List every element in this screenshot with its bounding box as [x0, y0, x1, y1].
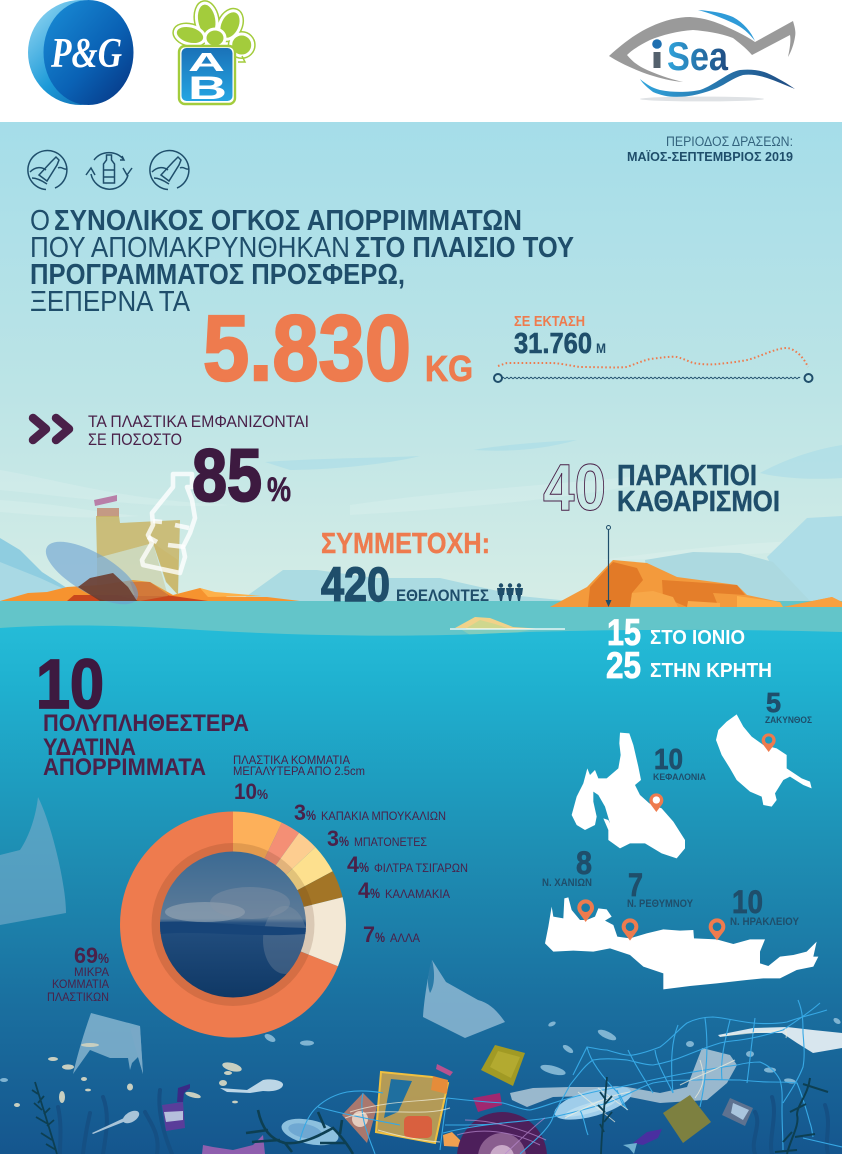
- segment: other 7%: [233, 897, 346, 966]
- label: Chania 8: Ν. ΧΑΝΙΩΝ: [542, 877, 592, 889]
- plastics share stat: ΣΕ ΠΟΣΟΣΤΟ: [88, 430, 182, 449]
- pin: Heraklion: [709, 918, 725, 940]
- main title: [30, 205, 574, 318]
- label: caps: %: [306, 807, 316, 823]
- participation stat: 420: [321, 559, 390, 612]
- main title: ΣΥΝΟΛΙΚΟΣ ΟΓΚΟΣ ΑΠΟΡΡΙΜΜΑΤΩΝ: [54, 205, 522, 237]
- fishing net: [300, 1000, 842, 1154]
- label: straws: ΚΑΛΑΜΑΚΙΑ: [385, 887, 450, 901]
- pin: Chania: [577, 899, 594, 922]
- label: large pieces 10%: %: [257, 786, 268, 802]
- logo: iSea: Sea: [667, 35, 729, 79]
- label: large pieces 10%: [233, 753, 365, 804]
- icon: bottle in waves 1: [28, 151, 67, 190]
- segment: straws 4%: [233, 871, 343, 924]
- segment: small plastics 69%: [120, 812, 338, 1038]
- label: Kefalonia 10: [653, 744, 706, 783]
- label: cotton buds: 3: [327, 826, 339, 851]
- inner shadow ring: [152, 843, 314, 1006]
- label: straws: %: [370, 885, 380, 901]
- background seaweed silhouettes: [58, 1090, 828, 1154]
- label: other: ΑΛΛΑ: [390, 931, 420, 945]
- heading: top 10 marine litter: 10: [36, 645, 104, 723]
- seaweed: centre: [246, 1110, 353, 1154]
- participation stat: ΣΥΜΜΕΤΟΧΗ:: [321, 528, 490, 560]
- label: Rethymno 7: Ν. ΡΕΘΥΜΝΟΥ: [627, 898, 694, 910]
- donut labels: [47, 753, 468, 1004]
- map: Zakynthos: [716, 714, 812, 807]
- plastics share stat: %: [267, 471, 291, 509]
- cleanup split by region: ΣΤΟ ΙΟΝΙΟ: [650, 627, 745, 649]
- rocks: right shore: [550, 560, 842, 607]
- blue disc: [279, 1114, 341, 1150]
- label: small pieces 69%: ΚΟΜΜΑΤΙΑ: [52, 977, 109, 991]
- purple bottle: [162, 1084, 190, 1131]
- pin: Rethymno: [622, 918, 638, 941]
- coastline length stat: [494, 313, 812, 382]
- label: caps: 3: [294, 800, 306, 825]
- translucent plastic sheet: [510, 1048, 737, 1107]
- foreground seaweed: [32, 1077, 828, 1154]
- label: Kefalonia 10: ΚΕΦΑΛΟΝΙΑ: [653, 772, 706, 783]
- heading: top 10 marine litter: ΑΠΟΡΡΙΜΜΑΤΑ: [43, 754, 206, 781]
- logo: iSea: [609, 10, 795, 101]
- label: other: [363, 922, 420, 947]
- label: small pieces 69%: ΠΛΑΣΤΙΚΩΝ: [47, 990, 109, 1004]
- logo: P&G: P&G: [50, 31, 122, 77]
- illustration: plastic bag far left: [0, 797, 66, 925]
- logo: AB: A: [188, 47, 225, 77]
- label: cotton buds: [327, 826, 427, 851]
- cleanup split by region: ΣΤΗΝ ΚΡΗΤΗ: [650, 660, 772, 682]
- pin: Kefalonia: [649, 793, 663, 812]
- label: large pieces 10%: ΜΕΓΑΛΥΤΕΡΑ ΑΠΟ 2.5cm: [233, 764, 365, 778]
- label: small pieces 69%: [47, 943, 109, 1004]
- sky background: [0, 122, 842, 612]
- label: Chania 8: 8: [576, 845, 592, 881]
- blue cloud wisps: [265, 440, 842, 479]
- period of actions: ΠΕΡΙΟΔΟΣ ΔΡΑΣΕΩΝ:: [666, 134, 793, 149]
- map labels: [542, 687, 812, 928]
- coastline length stat: 31.760: [514, 328, 592, 360]
- label: Heraklion 10: [730, 884, 800, 928]
- island maps: [545, 714, 818, 989]
- centre photo: sea: [160, 851, 307, 998]
- header white band: [0, 0, 842, 122]
- main title: ΠΟΥ ΑΠΟΜΑΚΡΥΝΘΗΚΑΝ: [30, 232, 350, 264]
- arrow: from coast to counts: [606, 526, 612, 607]
- seaweed: left: [32, 1082, 57, 1154]
- logo: AB: [173, 2, 253, 106]
- participation stat: ΕΘΕΛΟΝΤΕΣ: [396, 586, 489, 605]
- big number: 5.830 kg: 5.830: [203, 296, 411, 400]
- grey box: [722, 1098, 753, 1126]
- label: Rethymno 7: 7: [628, 867, 643, 903]
- island reflection: [450, 617, 565, 641]
- purple fish-shaped fragment: [623, 1129, 662, 1154]
- sea background: [0, 601, 842, 1154]
- label: cigarette filters: %: [359, 859, 369, 875]
- purple net strands over disc: [457, 1118, 546, 1154]
- icon: volunteers: [497, 583, 523, 601]
- plastics share stat: 85: [192, 434, 262, 517]
- label: other: %: [375, 929, 385, 945]
- heading: top 10 marine litter: ΥΔΑΤΙΝΑ: [43, 734, 136, 761]
- diamond packet: [342, 1093, 377, 1143]
- label: small pieces 69%: %: [98, 950, 109, 966]
- heading: top 10 marine litter: [36, 645, 249, 781]
- coastal cleanups stat: ΠΑΡΑΚΤΙΟΙ: [617, 460, 757, 492]
- label: cigarette filters: 4: [347, 852, 360, 877]
- seaweed: middle right: [598, 1077, 612, 1154]
- coastline length stat: ΣΕ ΕΚΤΑΣΗ: [514, 313, 585, 330]
- label: cigarette filters: [347, 852, 468, 877]
- cleanup split by region: 15: [607, 612, 641, 653]
- cleanup split by region: [606, 612, 772, 686]
- illustration: jug, bottle and disc floating: [37, 474, 195, 616]
- label: other: 7: [363, 922, 375, 947]
- period of actions: ΜΑΪΟΣ-ΣΕΠΤΕΜΒΡΙΟΣ 2019: [627, 149, 793, 164]
- label: caps: ΚΑΠΑΚΙΑ ΜΠΟΥΚΑΛΙΩΝ: [321, 809, 446, 823]
- green packet: [663, 1095, 711, 1143]
- mountains: [0, 516, 842, 601]
- coastal cleanups stat: ΚΑΘΑΡΙΣΜΟΙ: [617, 486, 780, 518]
- illustration: plastic bag left: [73, 1013, 143, 1074]
- label: small pieces 69%: 69: [74, 943, 98, 968]
- blue disc right: [551, 1079, 635, 1127]
- logo: AB: B: [188, 70, 227, 106]
- map: Kefalonia: [572, 733, 685, 858]
- illustration: bottom litter: [92, 1027, 842, 1154]
- yellow jug: [376, 1064, 462, 1147]
- donut chart: [120, 812, 346, 1038]
- seaweed: right: [775, 1078, 828, 1154]
- pink packet: [473, 1093, 502, 1112]
- label: large pieces 10%: 10: [234, 779, 257, 804]
- clouds: [0, 470, 842, 560]
- coastal cleanups stat: [543, 450, 780, 524]
- big number: 5.830 kg: KG: [425, 348, 473, 389]
- segment: large plastics 10%: [233, 812, 282, 924]
- icon: double chevron: [33, 418, 69, 440]
- plastics share stat: ΤΑ ΠΛΑΣΤΙΚΑ ΕΜΦΑΝΙΖΟΝΤΑΙ: [88, 412, 309, 431]
- label: Heraklion 10: 10: [732, 884, 763, 920]
- participation stat: [321, 528, 523, 612]
- label: cotton buds: %: [339, 833, 349, 849]
- deep sea: [0, 626, 842, 1154]
- label: small pieces 69%: ΜΙΚΡΑ: [74, 965, 109, 979]
- segment: cigarette filters 4%: [233, 847, 333, 924]
- rocks: left shore: [0, 580, 300, 601]
- white plastic top right: [718, 1027, 842, 1053]
- plastic fragments: [0, 1017, 842, 1107]
- map: Crete: [545, 897, 818, 989]
- purple fragment: [202, 1135, 265, 1154]
- icon group: bottle recycling: [28, 151, 189, 190]
- label: cotton buds: ΜΠΑΤΟΝΕΤΕΣ: [354, 835, 427, 849]
- label: Kefalonia 10: 10: [654, 744, 683, 776]
- illustration: plastic bag right of donut: [423, 960, 505, 1038]
- main title: Ο: [30, 205, 50, 237]
- logo: P&G: [28, 0, 134, 105]
- olive box: [481, 1045, 525, 1086]
- coastal cleanups stat: 40: [543, 450, 606, 524]
- label: caps: [294, 800, 446, 825]
- main title: ΠΡΟΓΡΑΜΜΑΤΟΣ ΠΡΟΣΦΕΡΩ,: [30, 259, 405, 291]
- segment: cotton buds 3%: [233, 833, 315, 924]
- label: straws: 4: [358, 878, 371, 903]
- label: cigarette filters: ΦΙΛΤΡΑ ΤΣΙΓΑΡΩΝ: [374, 861, 468, 875]
- label: large pieces 10%: ΠΛΑΣΤΙΚΑ ΚΟΜΜΑΤΙΑ: [233, 753, 350, 767]
- label: Zakynthos 5: 5: [766, 687, 781, 718]
- purple disc: [457, 1112, 547, 1154]
- net highlights: [345, 1028, 786, 1142]
- plastics share stat: [88, 412, 309, 517]
- label: straws: [358, 878, 450, 903]
- label: Zakynthos 5: ΖΑΚΥΝΘΟΣ: [765, 715, 812, 726]
- pin: Zakynthos: [762, 733, 776, 752]
- icon: recycling bottle: [86, 153, 132, 189]
- label: Rethymno 7: [627, 867, 694, 910]
- main title: ΣΤΟ ΠΛΑΙΣΙΟ ΤΟΥ: [355, 232, 574, 264]
- spoon: [92, 1108, 141, 1134]
- coastline length stat: M: [596, 340, 606, 356]
- main title: ΞΕΠΕΡΝΑ ΤΑ: [30, 286, 191, 318]
- heading: top 10 marine litter: ΠΟΛΥΠΛΗΘΕΣΤΕΡΑ: [43, 710, 249, 737]
- label: Heraklion 10: Ν. ΗΡΑΚΛΕΙΟΥ: [730, 916, 800, 928]
- cleanup split by region: 25: [606, 645, 641, 686]
- icon: bottle in waves 2: [150, 151, 189, 190]
- label: Chania 8: [542, 845, 592, 889]
- segment: caps 3%: [233, 823, 299, 924]
- label: Zakynthos 5: [765, 687, 812, 726]
- period of actions: [627, 134, 793, 164]
